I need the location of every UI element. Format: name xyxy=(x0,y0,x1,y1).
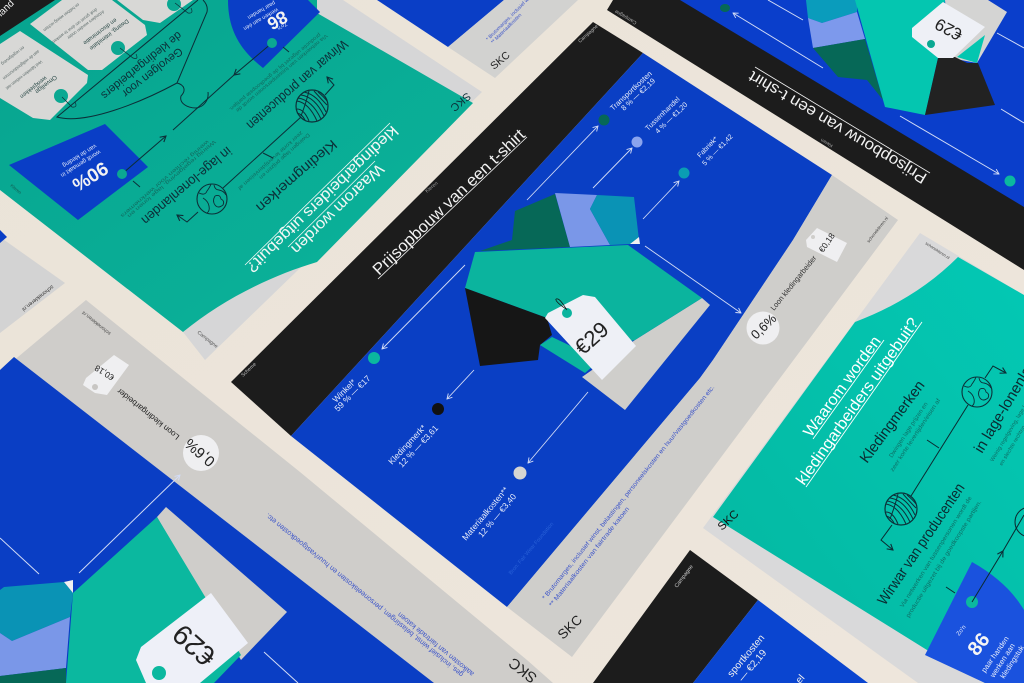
price tag €29 xyxy=(136,593,248,683)
section: Wirwar van producenten: Via netwerken van tussenpersonen wordt de xyxy=(900,495,974,609)
price tag €29: €29 xyxy=(932,14,966,44)
section: Kledingmerken: Kledingmerken xyxy=(857,377,929,466)
consequence tag: unsafe workplaces: Onveilige xyxy=(33,73,58,95)
panel: upper-right blue poster xyxy=(607,0,1024,270)
title: Waarom worden xyxy=(800,333,885,440)
stat block: 86: Zo'n xyxy=(956,624,968,637)
label: Kleren: Kleren xyxy=(9,183,23,195)
price tag €29: €29 xyxy=(570,317,614,360)
icon: globe xyxy=(197,184,227,214)
small tag €0,18 xyxy=(806,228,847,262)
label: Materiaalkosten: Materiaalkosten** xyxy=(460,484,511,542)
consequence tag: intimidation: druk gezet om door te werken xyxy=(51,7,98,45)
label: Transportkosten: Transportkosten xyxy=(608,69,654,112)
section: Wirwar van producenten: Via netwerken van tussenpersonen wordt de xyxy=(234,32,329,113)
panel: bottom black poster fragment xyxy=(593,550,868,683)
panel: bottom black poster fragment: Campagne xyxy=(674,564,695,589)
label: Winkel: 59 % — €17 xyxy=(332,373,373,413)
title: kledingarbeiders uitgebuit? xyxy=(793,315,923,488)
icon: yarn xyxy=(296,90,328,122)
label: Transportkosten: 8 % — €2,19 xyxy=(619,76,657,112)
section: Wirwar van producenten: productie uitgezet bij de goedkoopste partijen. xyxy=(906,499,983,619)
section: Kledingmerken: Dwingen lage prijzen en xyxy=(889,402,930,459)
stat block: 86: werken aan xyxy=(988,642,1017,680)
price tag €29 xyxy=(912,2,985,58)
label: Kleren: Kleren xyxy=(819,137,834,148)
section: in lage-lonenlanden: weinig rechten voor werknemers xyxy=(118,138,210,219)
label: Scheme: Scheme xyxy=(240,361,258,378)
stat block: 86: paar handen xyxy=(979,634,1011,674)
panel: top middle fragment xyxy=(377,0,578,78)
t-shirt graphic xyxy=(0,507,287,683)
small tag €0,18: €0,18 xyxy=(92,363,116,383)
SKC logo: SKC xyxy=(448,90,473,113)
label: Tussenhandel: Tussenhandel xyxy=(643,95,682,132)
title: kledingarbeiders uitgebuit? xyxy=(243,122,401,276)
panel: upper-left teal poster (upside down) xyxy=(0,0,482,360)
consequence tag: intimidation: en discriminatie xyxy=(82,16,117,45)
footnotes: ** Materiaalkosten van fairtrade katoen xyxy=(548,505,631,608)
arrows xyxy=(733,0,1024,174)
SKC logo: SKC xyxy=(555,612,585,642)
label: Campagne: Campagne xyxy=(196,330,219,350)
label: Loon kledingarbeider: Loon kledingarbeider xyxy=(769,253,819,312)
heading: consequences: de kledingarbeiders xyxy=(98,29,184,101)
t-shirt graphic xyxy=(465,193,710,410)
footnotes: * Brutomarges, inclusief winst, belastingen, personeelskosten en huur/vastgoedkosten etc. xyxy=(541,384,716,601)
section: Wirwar van producenten: productie uitgezet bij de goedkoopste partijen. xyxy=(227,31,322,112)
label: Fabriek: 5 % — €1,42 xyxy=(701,133,735,167)
panel: top middle fragment: ** Materiaalkosten xyxy=(490,12,523,45)
consequence tag: intimidation: Arbeiders worden onder xyxy=(66,9,105,41)
flow connector between icons xyxy=(177,77,334,222)
label: site: schonekleren.nl xyxy=(924,241,951,260)
section: Kledingmerken: Dwingen lage prijzen en xyxy=(258,132,311,180)
connector with arrows xyxy=(117,38,289,187)
stat block: 90%: van de kleding xyxy=(61,142,97,168)
consequence tag: third tag xyxy=(117,0,193,23)
icon: yarn xyxy=(885,493,917,525)
stat block: 90%: wordt gemaakt in xyxy=(59,148,102,178)
panel: lower-left blue poster (upside down) xyxy=(0,300,553,683)
section: Kledingmerken: zeer korte levertijden/eisen af xyxy=(890,398,942,473)
consequence tag: intimidation xyxy=(30,0,147,70)
section: in lage-lonenlanden: in lage-lonenlanden xyxy=(139,144,235,228)
footnotes: ges, inclusief winst, belastingen, personeelskosten en huur/vastgoedkosten etc. xyxy=(264,511,465,679)
label: site: schonekleren.nl xyxy=(81,309,112,336)
section: in lage-lonenlanden: Weinig regelgeving, lage lonen en xyxy=(126,138,217,219)
stat block: 86 xyxy=(228,0,320,68)
source line: Bron: Fair Wear Foundation xyxy=(508,522,555,576)
panel: bottom black poster fragment: sportkosten xyxy=(726,633,767,680)
consequence tag: intimidation: Dwang, intimidatie xyxy=(88,17,129,51)
stat block: 90%: 90% xyxy=(68,157,111,195)
stat block: 90% xyxy=(9,124,148,220)
wage: 0,6%: 0,6% xyxy=(748,310,780,342)
consequence tag: unsafe workplaces: werkplekken xyxy=(18,74,48,99)
t-shirt graphic xyxy=(806,0,1007,115)
gray footer strip xyxy=(507,175,898,657)
title: Waarom worden xyxy=(287,160,387,257)
label: Materiaalkosten: 12 % — €3,40 xyxy=(476,491,518,539)
label: Kleren: Kleren xyxy=(424,181,440,195)
icon: globe xyxy=(962,377,992,407)
data dots xyxy=(720,4,1016,186)
panel: left small gray fragment xyxy=(0,230,65,333)
stat block: 86 xyxy=(925,562,1024,683)
label: Campagne: Campagne xyxy=(614,8,638,25)
label: Tussenhandel: 4 % — €1,20 xyxy=(653,100,689,135)
consequence tag: unsafe workplaces xyxy=(0,31,88,120)
black corner with cut-off title xyxy=(0,0,55,36)
consequence tag: intimidation: en hebben weinig rechten xyxy=(42,2,80,33)
stat block: 86: Zo'n xyxy=(276,20,288,31)
wage: 0,6%: 0,6% xyxy=(182,435,219,470)
label: Winkel: Winkel* xyxy=(330,376,358,404)
stat block: 86: werken aan één xyxy=(242,6,280,31)
small tag €0,18: €0,18 xyxy=(816,231,837,254)
label: Fabriek: Fabriek* xyxy=(696,136,720,159)
panel: centre poster, Prijsopbouw van een t-shirt xyxy=(231,22,898,657)
section: Kledingmerken xyxy=(236,130,341,216)
label: site: schonekleren.nl xyxy=(866,216,889,244)
label: Campagne: Campagne xyxy=(577,24,600,44)
label: Loon kledingarbeider: Loon kledingarbeider xyxy=(115,386,181,441)
footnotes: aalkosten van fairtrade katoen xyxy=(396,610,476,679)
hanger outline xyxy=(57,0,208,119)
panel: bottom black poster fragment: — €2,19 xyxy=(737,648,770,683)
SKC logo: SKC xyxy=(716,508,741,533)
heading: consequences: Gevolgen voor xyxy=(119,45,185,99)
section: Kledingmerken: zeer korte levertijden/eisen af xyxy=(236,130,304,191)
small tag €0,18 xyxy=(83,355,129,395)
arrows xyxy=(382,126,741,463)
panel: right teal poster xyxy=(703,233,1024,683)
section: Kledingmerken: Kledingmerken xyxy=(253,137,341,216)
stat block: 86: 86 xyxy=(964,629,995,660)
flow connectors xyxy=(881,366,1024,602)
black header band xyxy=(231,22,643,436)
title: Prijsopbouw van een t-shirt xyxy=(369,126,529,279)
data dots xyxy=(368,114,690,480)
title: Prijsopbouw van een t-shirt xyxy=(746,67,930,186)
label: Kledingmerk: Kledingmerk* xyxy=(386,422,428,466)
arrows xyxy=(0,475,298,683)
blue field xyxy=(291,53,832,607)
panel: top middle fragment: SKC xyxy=(488,49,513,72)
section: Wirwar van producenten: Wirwar van producenten xyxy=(874,480,968,608)
stat block: 86: 86 xyxy=(264,7,291,34)
label: Kledingmerk: 12 % — €3,61 xyxy=(396,423,440,469)
section: Wirwar van producenten: Wirwar van producenten xyxy=(244,37,351,133)
panel: left small gray fragment: schonekleren.nl xyxy=(20,283,54,312)
price tag €29: €29 xyxy=(167,618,222,673)
price tag €29 xyxy=(545,295,636,380)
